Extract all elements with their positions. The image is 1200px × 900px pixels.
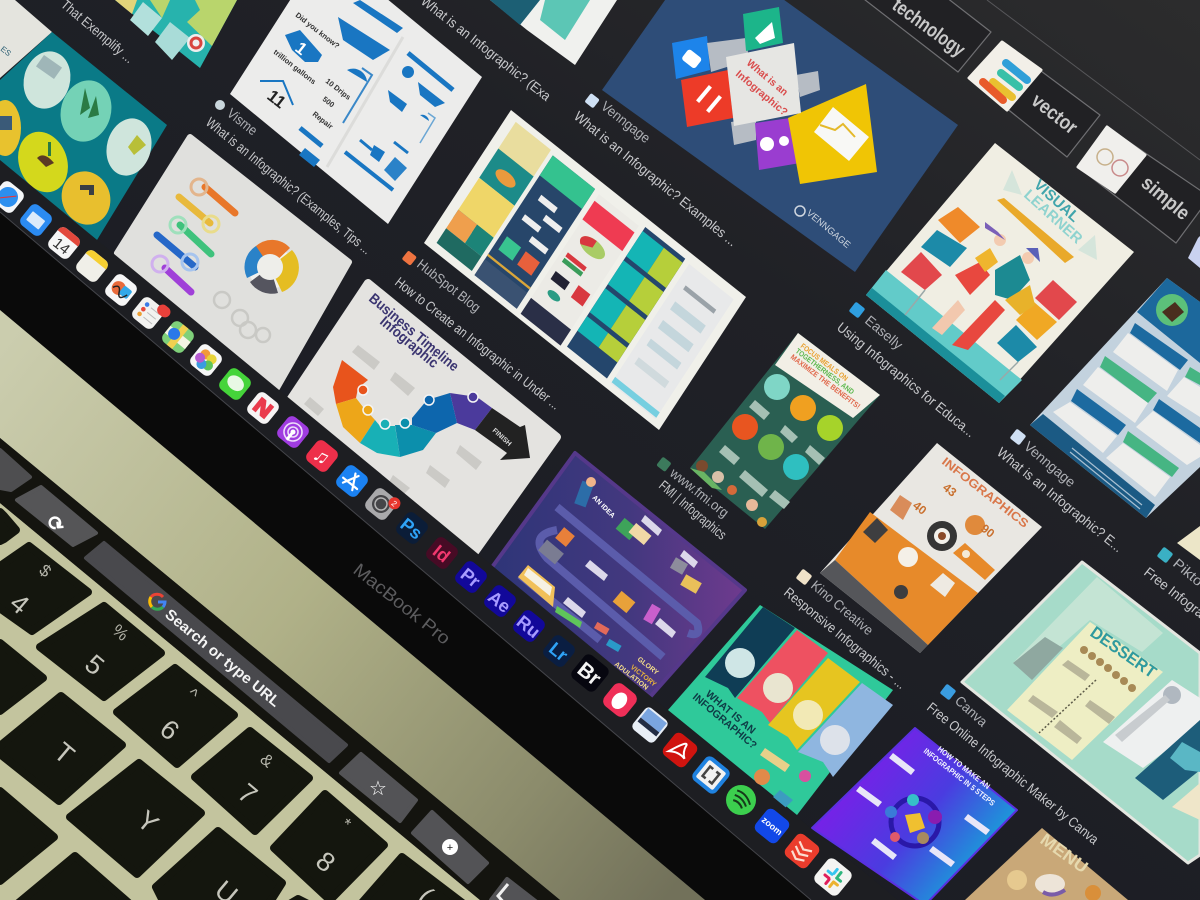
caption: HubSpot: How to Create an Infographic in Under ... bbox=[392, 274, 564, 413]
key caps bbox=[0, 512, 465, 900]
card: far-left partial thumbnail bbox=[0, 0, 52, 78]
template column 2 bbox=[474, 155, 595, 309]
caption: Visme: What is an Infographic? (Examples, Tips ... bbox=[203, 114, 375, 257]
key legends: 5 bbox=[79, 649, 110, 681]
card: Visme infographic bbox=[230, 0, 482, 224]
wheel chart bbox=[244, 240, 299, 294]
icon: Calendar: 14 bbox=[49, 235, 73, 258]
search filter pills bbox=[860, 0, 1200, 268]
icon: Music: ♫ bbox=[309, 444, 334, 470]
button: partial left bbox=[0, 450, 30, 490]
card: Visual Learner bbox=[866, 143, 1134, 403]
icon: After Effects: Ae bbox=[484, 587, 515, 617]
coloured heading: MAXIMIZE THE BENEFITS! bbox=[789, 352, 862, 411]
icon: Lightroom bbox=[541, 633, 577, 669]
divider between posters bbox=[327, 37, 403, 167]
small text blocks bbox=[304, 345, 482, 495]
icon: System Settings with badge: 2 bbox=[390, 499, 399, 509]
caption: HubSpot bbox=[392, 250, 564, 413]
green sign bbox=[555, 606, 582, 628]
yellow banner bbox=[997, 198, 1074, 263]
water facts: 500 bbox=[321, 94, 336, 109]
key legends: 7 bbox=[232, 778, 263, 810]
icon: Podcasts bbox=[275, 414, 311, 450]
water facts: 10 Drips bbox=[324, 76, 353, 102]
pale embossed chart bbox=[214, 292, 270, 342]
water facts: Did you know? bbox=[294, 10, 342, 51]
card: Venngage blue panels bbox=[1030, 278, 1200, 518]
card: tan menu: MENU bbox=[1037, 830, 1092, 877]
template column 5 bbox=[611, 264, 734, 419]
keyboard gaps bbox=[0, 503, 480, 900]
icon: Premiere Pro: Pr bbox=[457, 564, 484, 592]
button: new tab bbox=[413, 812, 487, 882]
card: HubSpot five templates bbox=[424, 110, 746, 430]
stepped coloured bars bbox=[157, 187, 235, 292]
small charts bbox=[754, 748, 811, 808]
MacBook Pro wordmark: MacBook Pro bbox=[350, 559, 454, 649]
caption: Easelly: Easelly bbox=[862, 312, 906, 353]
heading: HOW TO MAKE AN bbox=[936, 744, 992, 791]
pill: vector bbox=[969, 42, 1100, 157]
button: back chevron bbox=[491, 879, 560, 900]
caption: Canva: Free Online Infographic Maker by Canva bbox=[924, 699, 1102, 847]
caption: Visme bbox=[203, 100, 375, 257]
illustration circles bbox=[732, 374, 843, 480]
caption: Canva bbox=[924, 684, 1102, 847]
slogan: VICTORY bbox=[629, 664, 658, 689]
card: Venngage What is an Infographic bbox=[602, 0, 958, 272]
slogan: AN IDEA bbox=[591, 494, 616, 520]
icon: InDesign bbox=[424, 535, 460, 571]
water facts: 1 bbox=[292, 38, 311, 59]
key legends: Y bbox=[131, 805, 164, 839]
icon: Maps bbox=[160, 319, 196, 355]
water facts: 11 bbox=[264, 86, 289, 112]
stats and icons: 90 bbox=[978, 521, 998, 541]
icon: After Effects bbox=[482, 583, 518, 619]
heading: Infographic bbox=[376, 314, 441, 372]
heading on centre tile: Infographic? bbox=[733, 68, 790, 118]
icon: Calendar bbox=[46, 225, 82, 261]
pill: simple: simple bbox=[1137, 172, 1194, 225]
card: grey infographic collection bbox=[117, 137, 349, 388]
poster heading: DESSERT bbox=[1087, 623, 1160, 682]
pill: simple bbox=[1078, 127, 1200, 243]
blob icons bbox=[0, 55, 146, 195]
touch bar strip bbox=[0, 438, 560, 900]
laptop deck bbox=[0, 310, 705, 900]
card: dark purple journey illustration bbox=[490, 453, 745, 697]
card: Kino orange infographic bbox=[820, 443, 1042, 653]
signboard posts bbox=[905, 290, 1018, 380]
wheel diagram bbox=[885, 794, 942, 846]
icon: Slack bbox=[812, 856, 854, 898]
button: favourite star bbox=[341, 754, 416, 821]
caption: Venngage top: What is an Infographic? Examples ... bbox=[571, 108, 740, 249]
slogan: ADULATION bbox=[613, 661, 649, 692]
icon: Safari bbox=[0, 179, 26, 215]
step labels bbox=[856, 753, 990, 867]
key legends: & bbox=[256, 750, 278, 772]
card: Piktochart partial thumbnail bbox=[1177, 526, 1200, 560]
caption: Venngage top: Venngage bbox=[598, 98, 654, 146]
delivery van bbox=[518, 565, 555, 607]
heading: LEARNER bbox=[1020, 186, 1086, 248]
text snippets bbox=[563, 515, 698, 638]
icon: Premiere Rush: Ru bbox=[513, 611, 544, 642]
icon: Premiere Pro bbox=[453, 559, 489, 595]
icon: red stack bbox=[782, 831, 822, 871]
icon: Music bbox=[304, 438, 340, 474]
key legends bbox=[4, 561, 438, 900]
icon: gears bbox=[760, 136, 789, 151]
heading on centre tile: What is an bbox=[744, 57, 790, 98]
cream sheet bbox=[1172, 783, 1200, 820]
panel headers bbox=[1071, 323, 1200, 477]
icon: bricks bbox=[696, 85, 722, 113]
signboards bbox=[901, 207, 1077, 362]
key legends: 4 bbox=[4, 588, 35, 620]
heading: INFOGRAPHIC IN 5 STEPS bbox=[922, 746, 997, 808]
key legends: * bbox=[337, 815, 355, 834]
key legends: T bbox=[48, 737, 80, 770]
card: tan menu bbox=[965, 828, 1128, 900]
search field: Search or type URL bbox=[161, 606, 283, 711]
stats and icons bbox=[863, 480, 998, 599]
coloured heading: FOCUS MEALS ON bbox=[799, 341, 850, 383]
caption: Kino Creative: Responsive Infographics - ... bbox=[781, 584, 909, 692]
icon: chart bars bbox=[755, 22, 775, 44]
heading: INFOGRAPHIC? bbox=[690, 691, 759, 752]
icon: App Store bbox=[334, 463, 370, 499]
card: teal thumbnail at top bbox=[115, 0, 237, 68]
caption: Canva: Canva bbox=[952, 692, 991, 730]
caption: FMI: FMI | Infographics bbox=[656, 477, 730, 543]
card: green What is an Infographic bbox=[668, 605, 893, 815]
search field bbox=[86, 543, 346, 761]
characters bbox=[932, 222, 1040, 350]
icon: Brackets bbox=[690, 754, 732, 796]
button: reload bbox=[17, 487, 96, 545]
water facts: Repair bbox=[311, 109, 335, 131]
logo: VENNGAGE bbox=[804, 208, 852, 251]
icon: Bridge bbox=[569, 652, 611, 694]
footer rules bbox=[1070, 448, 1142, 509]
stats and icons: 43 bbox=[940, 480, 960, 500]
icon: System Settings with badge bbox=[363, 484, 403, 524]
icon: Spotify bbox=[726, 785, 756, 815]
card: violet How to make an infographic bbox=[812, 728, 1017, 900]
icon: Acrobat bbox=[660, 730, 700, 770]
icon: InDesign: Id bbox=[429, 541, 454, 567]
macOS dock bbox=[0, 160, 898, 900]
caption: Visme: Visme bbox=[224, 105, 261, 138]
button: reload: ⟳ bbox=[42, 511, 69, 539]
caption: Kino Creative bbox=[781, 569, 909, 692]
white sheet bbox=[1103, 680, 1200, 768]
poster text lines bbox=[1028, 660, 1115, 744]
card: FMI infographic bbox=[690, 333, 880, 529]
icon: Zoom: zoom bbox=[760, 815, 784, 837]
heading: VISUAL bbox=[1030, 176, 1083, 226]
icon: News bbox=[245, 390, 281, 426]
key legends: 6 bbox=[154, 714, 185, 746]
caption: Kino Creative: Kino Creative bbox=[808, 577, 877, 638]
button: favourite star: ☆ bbox=[369, 778, 387, 800]
card: teal circles infographic bbox=[0, 32, 167, 240]
figures bbox=[538, 477, 702, 652]
slogan bbox=[591, 494, 660, 692]
body text lines bbox=[719, 400, 825, 509]
icon: Bridge: Br bbox=[573, 658, 605, 690]
heading: Business Timeline bbox=[365, 291, 462, 375]
button: new tab: + bbox=[447, 842, 453, 854]
caption: Venngage right: What is an Infographic? E... bbox=[994, 444, 1126, 555]
icon: Lightroom: Lr bbox=[545, 638, 572, 665]
caption: Easelly: Using Infographics for Educa... bbox=[834, 319, 979, 440]
coloured heading: TOGETHERNESS, AND bbox=[794, 346, 856, 397]
icon: Reminders with badge bbox=[130, 292, 173, 334]
touch bar bbox=[0, 438, 560, 900]
icon: Photos bbox=[188, 342, 224, 378]
poster heading bbox=[1039, 623, 1160, 733]
ribbon timeline: FINISH bbox=[491, 427, 512, 448]
ribbon timeline bbox=[333, 360, 530, 460]
caption: FMI: www.fmi.org bbox=[666, 464, 732, 520]
icon: Mail bbox=[18, 202, 54, 238]
template column 3 bbox=[521, 194, 639, 346]
people row bbox=[690, 460, 767, 527]
winding road bbox=[520, 507, 698, 657]
card: Business Timeline Infographic bbox=[290, 283, 557, 552]
pill: vector: vector bbox=[1027, 90, 1082, 139]
key legends: $ bbox=[35, 561, 55, 581]
card: small thumbnail at top centre bbox=[490, 0, 617, 65]
top divider line bbox=[987, 0, 1200, 160]
water facts: trillion gallons bbox=[272, 47, 318, 86]
icon: photo app bbox=[630, 705, 670, 745]
heading: WHAT IS AN bbox=[703, 688, 758, 737]
icon: Messages bbox=[217, 366, 253, 402]
icon: speech bubble bbox=[681, 49, 702, 69]
caption: Venngage right: Venngage bbox=[1021, 438, 1079, 490]
pill: partial next thumbnail bbox=[1188, 236, 1200, 268]
card: Kino orange infographic: INFOGRAPHICS bbox=[939, 454, 1031, 531]
card: Canva dessert menu bbox=[962, 562, 1200, 863]
template column 1 bbox=[437, 122, 551, 271]
icon: Notes bbox=[74, 248, 110, 284]
panel bodies bbox=[1053, 333, 1200, 497]
caption: FMI bbox=[656, 457, 732, 543]
stats and icons: 40 bbox=[910, 498, 930, 518]
dock background bbox=[0, 160, 898, 900]
icon: Freeform bbox=[103, 272, 139, 308]
small repeated poster bbox=[345, 53, 453, 190]
caption: HubSpot: HubSpot Blog bbox=[414, 256, 484, 315]
key legends: % bbox=[108, 621, 132, 645]
keyboard bbox=[0, 503, 480, 900]
key legends: 8 bbox=[310, 846, 341, 878]
icon: Photoshop bbox=[394, 510, 430, 546]
slogan: GLORY bbox=[636, 656, 660, 677]
key legends: ^ bbox=[183, 685, 202, 704]
blue sheet bbox=[1135, 720, 1200, 800]
icon: Zoom bbox=[752, 806, 792, 846]
icon: chart line bbox=[820, 124, 855, 137]
icon: red app bbox=[600, 680, 640, 720]
template column 4 bbox=[567, 227, 685, 378]
icon: Photoshop: Ps bbox=[397, 514, 426, 543]
water facts bbox=[260, 0, 403, 167]
icon: Google G bbox=[150, 594, 165, 609]
